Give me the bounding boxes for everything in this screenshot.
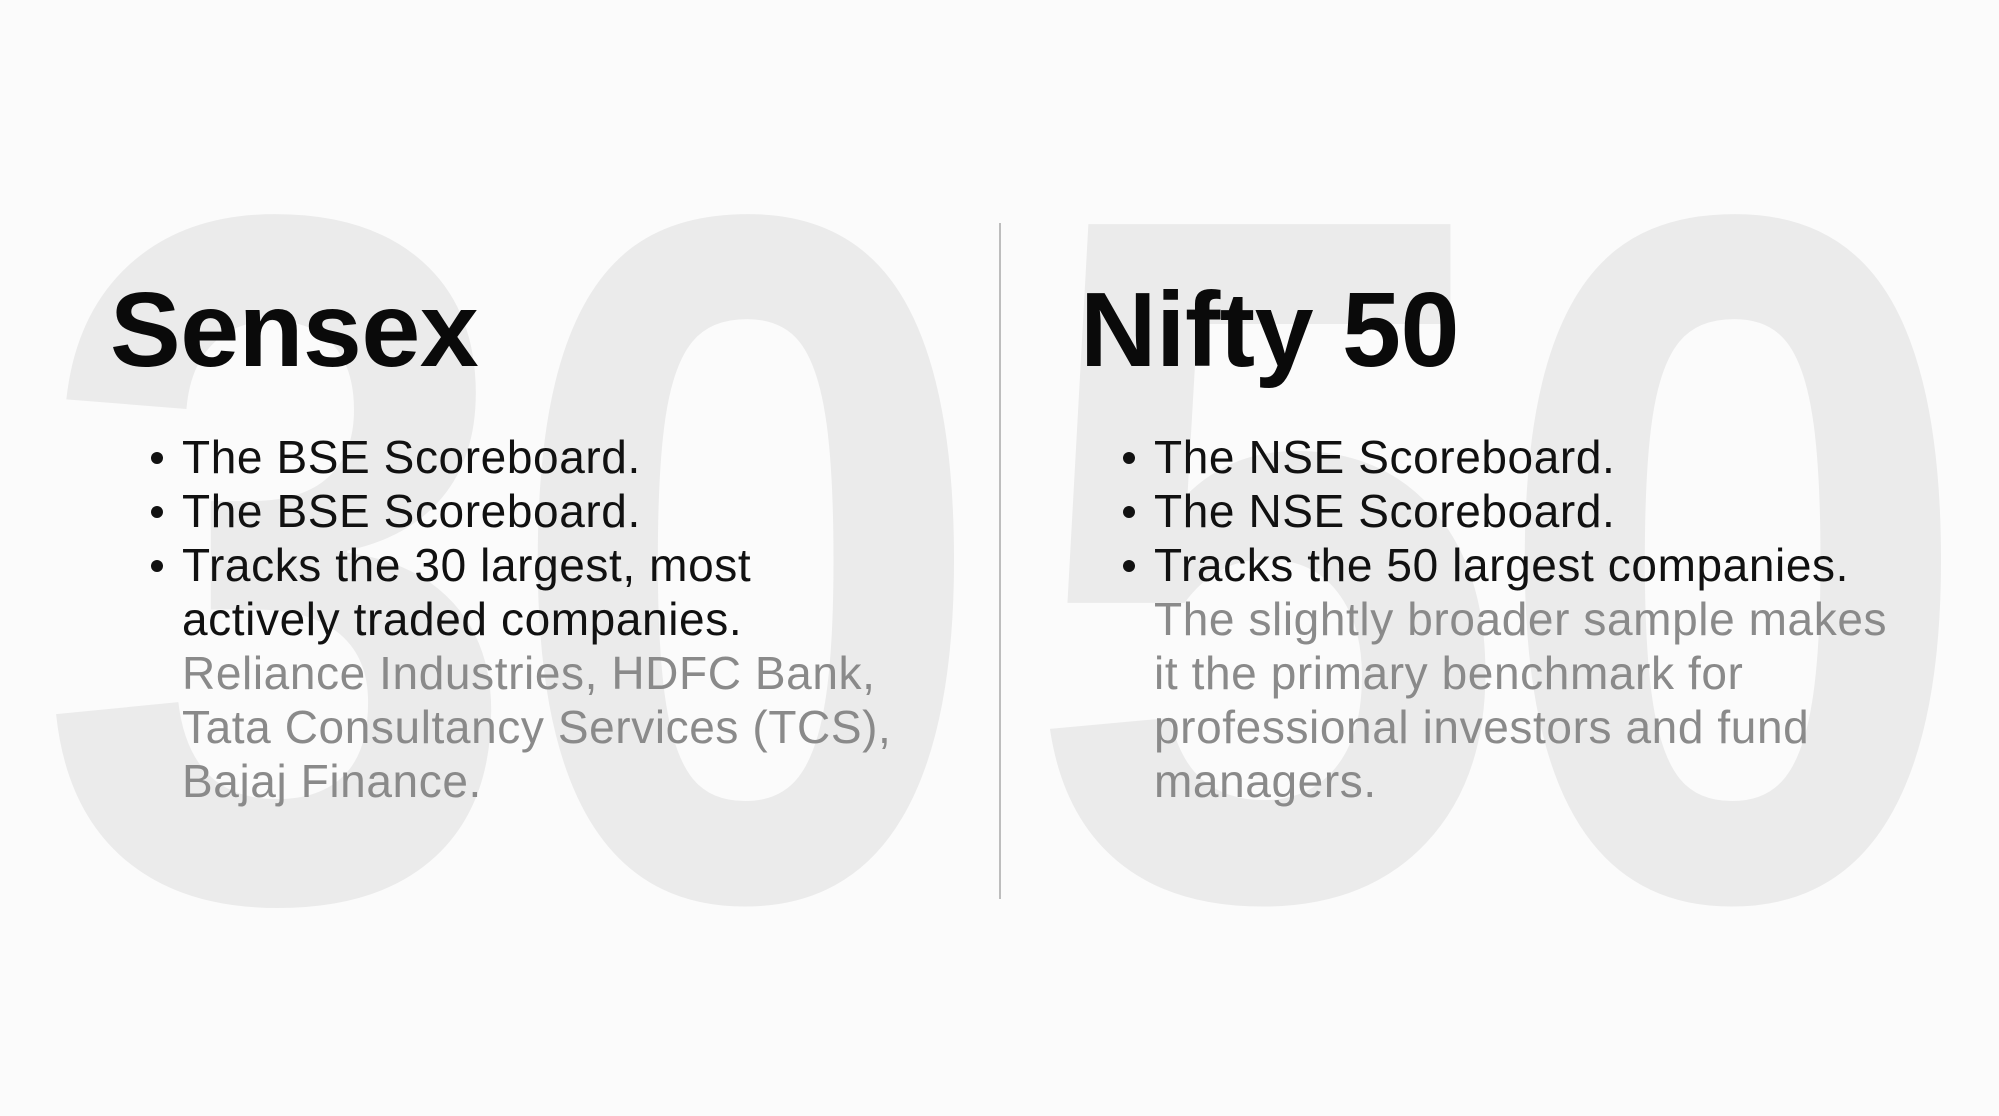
list: Sensex points: Tata Consultancy Services (TCS),: [182, 701, 891, 753]
list: Sensex points: The BSE Scoreboard.: [182, 431, 641, 483]
title: Sensex: Sensex: [110, 271, 478, 389]
background numeral 50: 50: [1023, 13, 1957, 1105]
list: Nifty points: [1123, 431, 1887, 807]
list: Nifty points: The NSE Scoreboard.: [1154, 431, 1615, 483]
list: Nifty points: The NSE Scoreboard.: [1154, 485, 1615, 537]
divider: [999, 223, 1001, 899]
list: Nifty points: managers.: [1154, 755, 1377, 807]
background numeral 30: 30: [36, 13, 970, 1105]
list: Sensex points: [151, 431, 891, 807]
list: Sensex points: Reliance Industries, HDFC Bank,: [182, 647, 876, 699]
list: Nifty points: Tracks the 50 largest companies.: [1154, 539, 1849, 591]
list: Sensex points: The BSE Scoreboard.: [182, 485, 641, 537]
list: Sensex points: Tracks the 30 largest, most: [182, 539, 751, 591]
list: Nifty points: The slightly broader sample makes: [1154, 593, 1887, 645]
list: Nifty points: professional investors and fund: [1154, 701, 1809, 753]
title: Nifty 50: Nifty 50: [1080, 271, 1459, 389]
list: Sensex points: Bajaj Finance.: [182, 755, 482, 807]
list: Sensex points: actively traded companies.: [182, 593, 742, 645]
list: Nifty points: it the primary benchmark for: [1154, 647, 1743, 699]
